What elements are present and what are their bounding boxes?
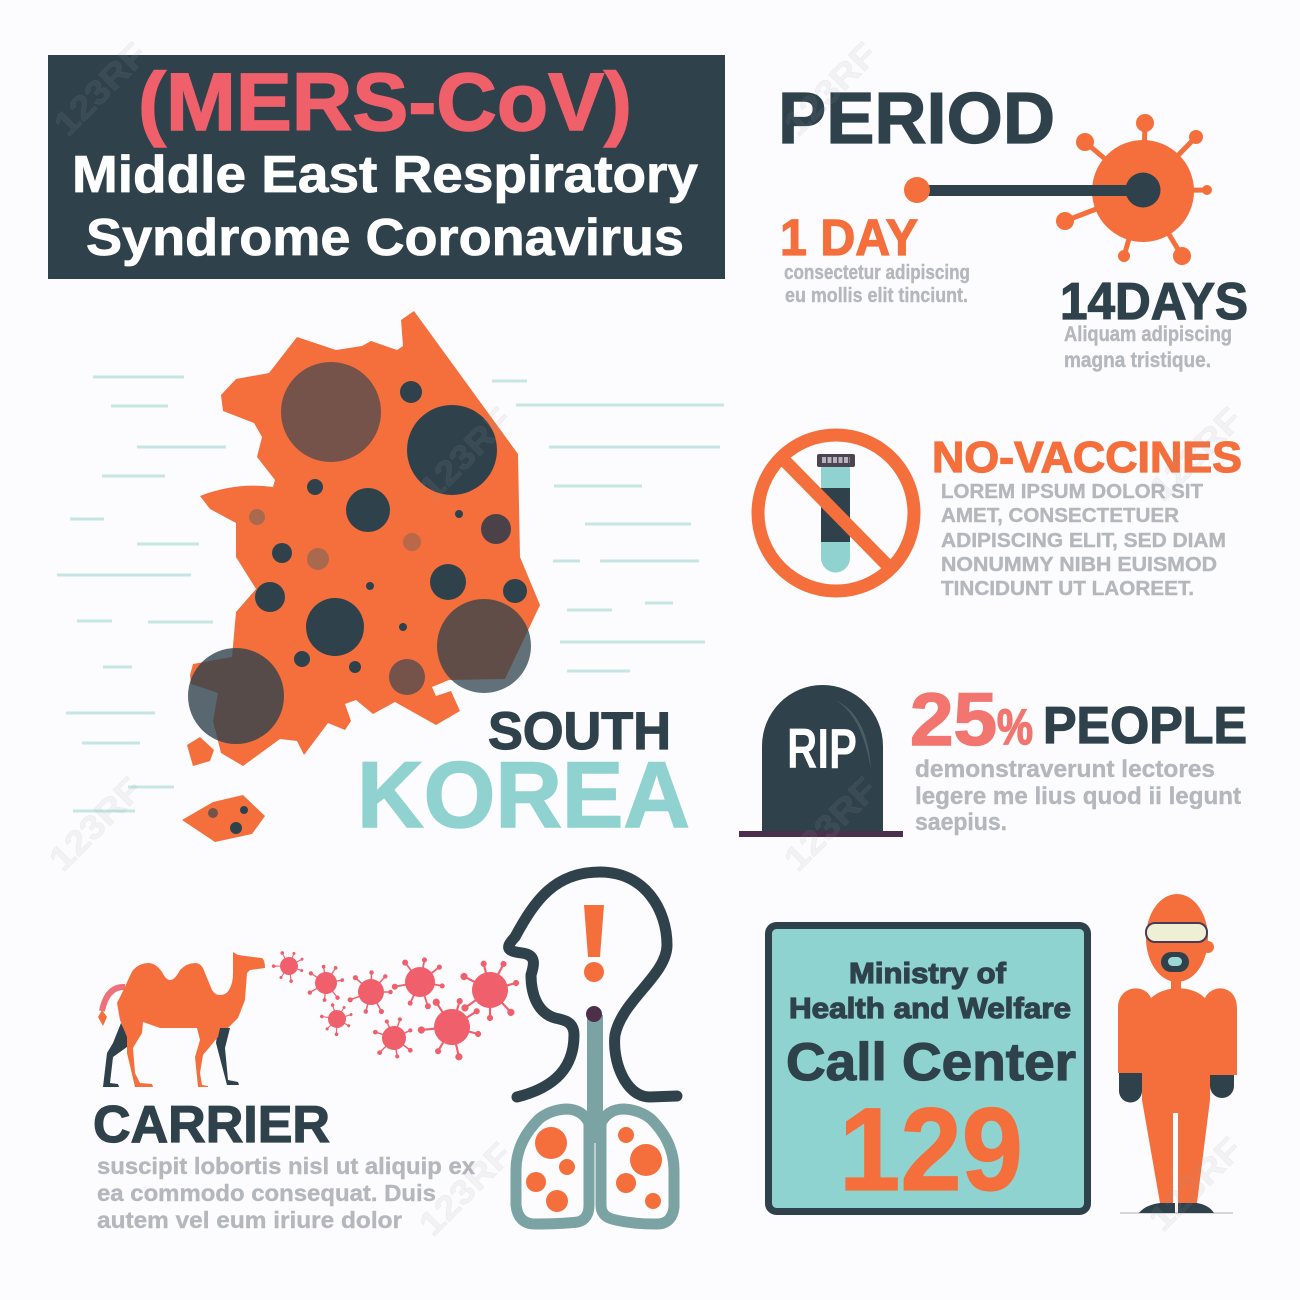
gloves (1119, 1073, 1234, 1102)
hind dark leg (103, 1023, 128, 1087)
panel: call center board: Ministry of (849, 958, 1006, 990)
icon: no vaccine sign (758, 435, 914, 591)
period heading: PERIOD (778, 79, 1055, 159)
neck (1171, 975, 1181, 995)
icon: RIP tombstone: RIP (787, 717, 857, 781)
no vaccines text: AMET, CONSECTETUER (941, 505, 1180, 527)
1 day label: eu mollis elit tinciunt. (785, 285, 968, 307)
panel: call center board: Health and Welfare (789, 993, 1071, 1025)
14 days label: 14DAYS (1060, 273, 1248, 331)
Jeju island (182, 795, 265, 842)
title banner: Syndrome Coronavirus (86, 209, 684, 267)
front dark leg (216, 1028, 239, 1085)
no vaccines text: ADIPISCING ELIT, SED DIAM (941, 530, 1226, 552)
heading: South Korea: SOUTH (488, 702, 671, 761)
panel: call center board: Call Center (786, 1033, 1076, 1092)
camel body (117, 952, 265, 1087)
icon: RIP tombstone (739, 685, 903, 837)
mortality statistic: 25 (910, 678, 997, 761)
infection circles (188, 362, 531, 834)
head (1146, 894, 1208, 982)
no vaccines text: NONUMMY NIBH EUISMOD (941, 554, 1217, 576)
1 day label: consectetur adipiscing (784, 262, 970, 284)
shoes (1139, 1203, 1214, 1213)
test tube (817, 454, 855, 572)
icon: head and lungs (509, 872, 677, 1224)
lungs (516, 1109, 674, 1224)
mortality statistic: demonstraverunt lectores (915, 756, 1215, 783)
map background speed lines (57, 377, 724, 811)
carrier heading: CARRIER (93, 1096, 330, 1154)
carrier body text (97, 1153, 475, 1233)
1 day label: 1 DAY (780, 209, 918, 266)
exclamation mark (584, 905, 604, 957)
faint watermark: 123RF (1142, 1130, 1250, 1239)
carrier body text: autem vel eum iriure dolor (97, 1207, 402, 1233)
faint watermark: 123RF (42, 770, 150, 879)
title banner: Middle East Respiratory (72, 146, 698, 204)
mortality statistic: saepius. (915, 809, 1007, 836)
mortality statistic (910, 678, 1247, 836)
faint watermark: 123RF (412, 1135, 520, 1244)
panel: call center board (768, 926, 1088, 1216)
icon: hazmat worker (1118, 894, 1237, 1214)
small island (187, 737, 214, 766)
period timeline virus icon (904, 114, 1212, 265)
panel: call center board: 129 (839, 1084, 1023, 1216)
head outline (509, 872, 677, 1097)
ground line (1120, 1212, 1233, 1214)
carrier body text: ea commodo consequat. Duis (97, 1180, 436, 1206)
mortality statistic: PEOPLE (1043, 697, 1247, 755)
suit (1118, 988, 1237, 1203)
goggles (1146, 923, 1207, 942)
mortality statistic: % (997, 699, 1033, 755)
faint watermark: 123RF (777, 35, 885, 144)
no vaccines text: NO-VACCINES (932, 433, 1242, 482)
mask (1161, 952, 1189, 972)
virus particles (269, 946, 527, 1066)
no vaccines text (932, 433, 1242, 600)
1 day label (780, 209, 970, 307)
mortality statistic: legere me lius quod ii legunt (915, 783, 1241, 810)
tail (102, 987, 125, 1011)
lung lesions (526, 1127, 662, 1212)
no vaccines text: LOREM IPSUM DOLOR SIT (941, 481, 1203, 503)
trachea (587, 1015, 603, 1143)
no vaccines text: TINCIDUNT UT LAOREET. (941, 578, 1194, 600)
faint watermark: 123RF (47, 35, 155, 144)
carrier body text: suscipit lobortis nisl ut aliquip ex (97, 1153, 475, 1179)
faint watermark: 123RF (777, 770, 885, 879)
faint watermark: 123RF (1142, 400, 1250, 509)
faint watermark: 123RF (412, 400, 520, 509)
14 days label (1060, 273, 1248, 372)
icon: camel (98, 952, 265, 1087)
heading: South Korea: KOREA (357, 742, 690, 847)
map: South Korea (182, 311, 540, 842)
14 days label: Aliquam adipiscing (1064, 323, 1232, 346)
title banner (48, 55, 725, 279)
14 days label: magna tristique. (1064, 349, 1211, 372)
title banner: (MERS-CoV) (138, 57, 632, 148)
